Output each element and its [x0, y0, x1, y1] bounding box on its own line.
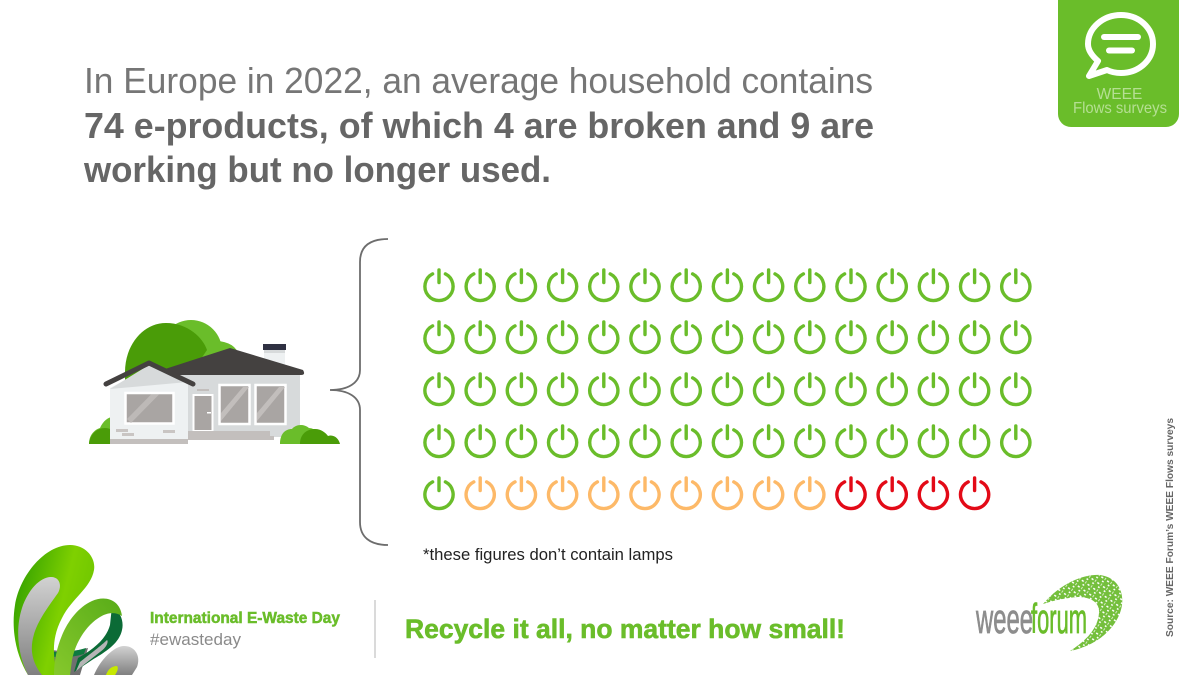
icon: speech bubble [1088, 15, 1153, 76]
badge label: WEEE [1097, 86, 1142, 103]
gable roof [106, 363, 193, 384]
title: 74 e-products, of which 4 are broken and 9 are [84, 105, 874, 146]
big grey inner band [18, 577, 60, 675]
second loop: green front [54, 599, 122, 675]
main wing wall [180, 374, 300, 437]
row 1 green [425, 270, 1030, 301]
curly brace [330, 239, 388, 545]
small lime accent [106, 666, 118, 675]
front window [126, 393, 174, 424]
footer label: International E-Waste Day: International E-Waste Day [150, 610, 340, 627]
front gable wall [110, 367, 188, 444]
row 5 red: broken [837, 478, 989, 509]
source note: Source: WEEE Forum’s WEEE Flows surveys [1164, 418, 1176, 637]
footer label: International E-Waste Day [150, 610, 340, 649]
slogan: Recycle it all, no matter how small! [405, 614, 845, 644]
small grey petal [94, 646, 138, 675]
second loop: grey strip [76, 640, 108, 671]
footer label: International E-Waste Day: #ewasteday [150, 630, 241, 649]
row 2 green [425, 322, 1030, 353]
row 4 green [425, 426, 1030, 457]
big green petal [14, 545, 94, 675]
title: In Europe in 2022, an average household contains [84, 60, 873, 101]
badge label [1073, 86, 1167, 117]
steps [188, 431, 274, 440]
icon grid: 74 power icons [425, 270, 1030, 509]
bricks [116, 429, 128, 432]
left bush [89, 416, 115, 444]
roof [162, 348, 304, 375]
title [83, 60, 874, 190]
chimney [264, 350, 285, 366]
row 5 green [425, 478, 453, 509]
swirl mark [1043, 575, 1122, 651]
title: working but no longer used. [83, 149, 551, 190]
dark inner core [42, 648, 88, 675]
wordmark: weee [975, 595, 1033, 642]
icon: house [89, 320, 340, 444]
second loop: dark green back [74, 606, 123, 672]
side windows [220, 385, 250, 424]
row 5 orange: working but unused [466, 478, 824, 509]
badge label: Flows surveys [1073, 100, 1167, 117]
badge: WEEE Flows surveys [1058, 0, 1179, 127]
footnote: *these figures don’t contain lamps [423, 546, 673, 564]
door [194, 395, 212, 431]
trees behind [125, 320, 238, 384]
logo: WEEE Forum [975, 575, 1122, 651]
right bush [280, 425, 322, 444]
logo: E-Waste Day swirl [14, 545, 138, 675]
row 3 green [425, 374, 1030, 405]
logo: WEEE Forum: forum [1031, 595, 1087, 642]
